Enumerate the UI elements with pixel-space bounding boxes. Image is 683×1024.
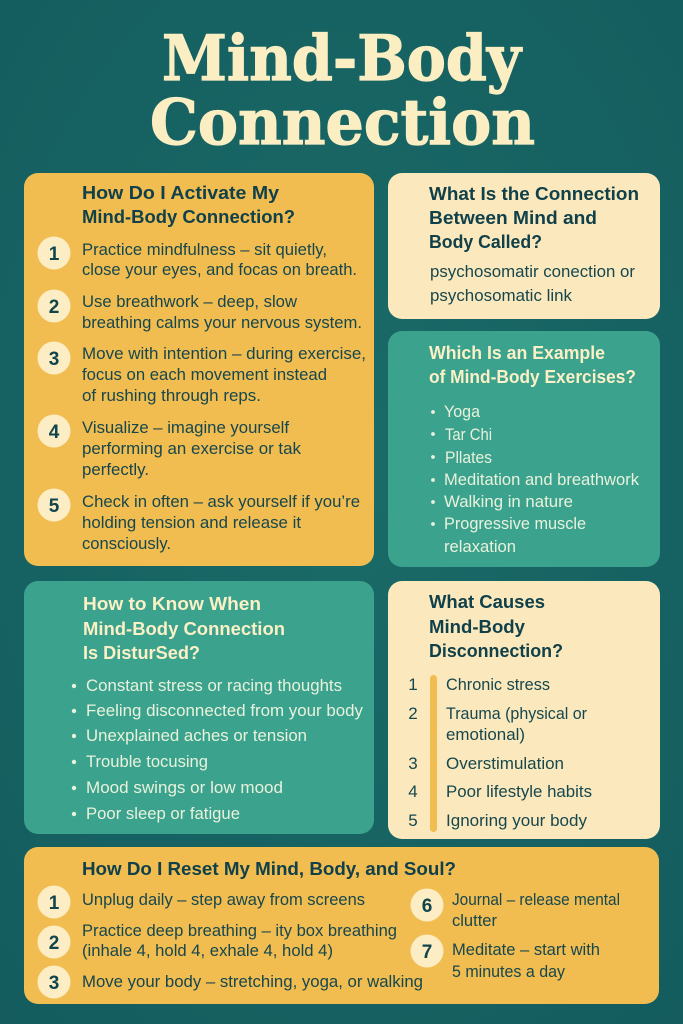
exercise list: Walking in nature	[444, 493, 573, 511]
heading: causes: Disconnection?	[429, 640, 563, 661]
heading: reset: How Do I Reset My Mind, Body, and Soul?	[82, 858, 456, 879]
step 3	[38, 342, 366, 405]
step 2: Use breathwork – deep, slow	[82, 293, 297, 311]
step 5: holding tension and release it	[82, 514, 301, 532]
step 3: focus on each movement instead	[82, 366, 327, 384]
exercise list: Meditation and breathwork	[444, 471, 640, 489]
heading: causes	[429, 591, 563, 661]
title: Connection	[150, 85, 535, 159]
numbered causes: Poor lifestyle habits	[446, 783, 592, 801]
heading: disturbed: Is DisturSed?	[83, 642, 200, 663]
heading: disturbed: How to Know When	[83, 593, 261, 614]
symptom list: Feeling disconnected from your body	[86, 702, 364, 720]
reset step 6: Journal – release mental	[452, 891, 620, 909]
title	[150, 21, 535, 159]
exercise list: Tar Chi	[445, 426, 492, 444]
reset step 7: 5 minutes a day	[452, 963, 566, 981]
heading: activate: Mind-Body Connection?	[82, 206, 295, 227]
symptom list: Trouble tocusing	[86, 753, 208, 771]
step 5: Check in often – ask yourself if you’re	[82, 493, 360, 511]
panel: causes of disconnection	[388, 581, 660, 839]
step 4	[38, 414, 302, 479]
step 4: performing an exercise or tak	[82, 440, 302, 458]
heading: connection called: What Is the Connection	[429, 183, 639, 204]
reset step 1: Unplug daily – step away from screens	[82, 891, 365, 909]
reset step 1: 1	[49, 893, 60, 914]
heading: disturbed	[83, 593, 285, 663]
heading: connection called	[429, 183, 639, 252]
numbered causes: Overstimulation	[446, 755, 564, 773]
reset step 3: Move your body – stretching, yoga, or walking	[82, 973, 423, 991]
panel: reset mind body soul	[24, 847, 659, 1004]
reset step 2: 2	[49, 933, 59, 954]
step 2: breathing calms your nervous system.	[82, 314, 362, 332]
step 2	[38, 290, 362, 332]
heading: exercises	[429, 342, 636, 387]
numbered causes: Ignoring your body	[446, 812, 588, 830]
exercise list: Yoga	[444, 403, 481, 421]
heading: causes: What Causes	[429, 591, 545, 612]
step 1: Practice mindfulness – sit quietly,	[82, 241, 327, 259]
numbered causes: Trauma (physical or	[446, 705, 587, 723]
numbered causes	[408, 675, 592, 830]
reset step 3	[38, 966, 423, 998]
numbered causes: 2	[408, 704, 418, 723]
step 1: 1	[49, 244, 60, 265]
step 1: close your eyes, and focas on breath.	[82, 261, 357, 279]
title: Mind-Body	[162, 21, 523, 95]
reset step 7: Meditate – start with	[452, 941, 600, 959]
reset step 6: clutter	[452, 912, 498, 930]
answer text: psychosomatir conection or	[430, 263, 636, 281]
reset step 6	[410, 888, 620, 930]
numbered causes: 4	[408, 782, 418, 801]
symptom list: Mood swings or low mood	[86, 779, 283, 797]
heading: exercises: of Mind-Body Exercises?	[429, 366, 636, 387]
step 3: Move with intention – during exercise,	[82, 345, 366, 363]
exercise list: Progressive muscle	[444, 515, 586, 533]
accent bar	[430, 675, 437, 832]
step 1	[38, 236, 357, 279]
symptom list: Poor sleep or fatigue	[86, 805, 240, 823]
reset step 3: 3	[49, 973, 59, 994]
heading: disturbed: Mind-Body Connection	[83, 618, 285, 639]
reset step 6: 6	[422, 896, 432, 917]
symptom list	[72, 677, 364, 823]
panel: what is the connection called	[388, 173, 660, 319]
reset step 2: Practice deep breathing – ity box breathing	[82, 922, 397, 940]
heading: activate: How Do I Activate My	[82, 182, 280, 203]
heading: connection called: Body Called?	[429, 231, 542, 252]
heading: exercises: Which Is an Example	[429, 342, 605, 363]
step 4: Visualize – imagine yourself	[82, 419, 289, 437]
reset step 1	[38, 886, 365, 918]
step 4: perfectly.	[82, 461, 149, 479]
step 2: 2	[49, 297, 59, 318]
reset step 7	[410, 934, 600, 981]
answer text	[430, 263, 636, 305]
exercise list: relaxation	[444, 538, 516, 556]
panel: how do I activate	[24, 173, 374, 566]
exercise list	[431, 403, 640, 556]
reset step 2	[38, 922, 397, 960]
exercise list: Pllates	[445, 449, 492, 467]
reset step 7: 7	[422, 942, 432, 963]
numbered causes: emotional)	[446, 726, 525, 744]
answer text: psychosomatic link	[430, 287, 573, 305]
step 5	[38, 488, 360, 553]
panel: connection disturbed	[24, 581, 374, 834]
numbered causes: 5	[408, 811, 418, 830]
numbered causes: 1	[408, 675, 418, 694]
step 4: 4	[49, 422, 60, 443]
panel: mind-body exercises	[388, 331, 660, 567]
symptom list: Unexplained aches or tension	[86, 727, 307, 745]
numbered causes: 3	[408, 754, 418, 773]
step 5: consciously.	[82, 535, 171, 553]
step 3: of rushing through reps.	[82, 387, 261, 405]
heading: activate	[82, 182, 295, 227]
reset step 2: (inhale 4, hold 4, exhale 4, hold 4)	[82, 942, 333, 960]
heading: connection called: Between Mind and	[429, 207, 597, 228]
numbered causes: Chronic stress	[446, 676, 550, 694]
step 5: 5	[49, 496, 60, 517]
heading: causes: Mind-Body	[429, 616, 526, 637]
step 3: 3	[49, 349, 59, 370]
symptom list: Constant stress or racing thoughts	[86, 677, 342, 695]
